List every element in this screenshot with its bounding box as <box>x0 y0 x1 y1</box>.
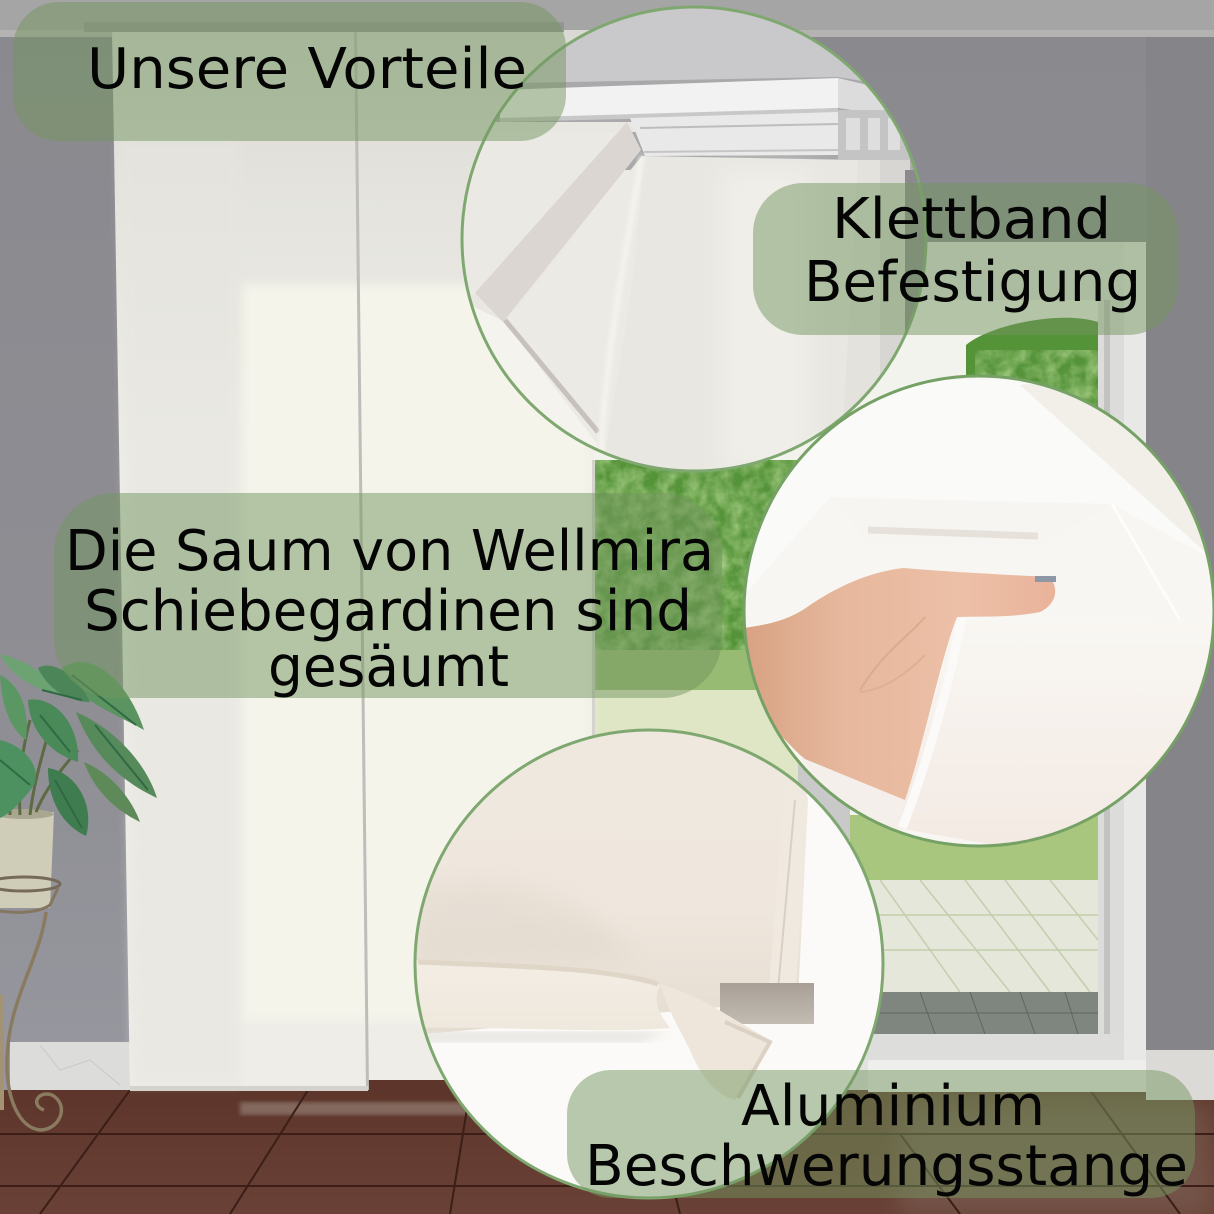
label: Aluminium Beschwerungsstange <box>567 1070 1195 1199</box>
label: Unsere Vorteile <box>13 2 566 141</box>
skirting board <box>10 1042 1214 1100</box>
label: Klettband Befestigung <box>753 183 1178 335</box>
metal stand <box>0 877 61 1130</box>
floor <box>0 1078 1214 1214</box>
detail circle: hand with hem <box>740 376 1214 860</box>
detail circle: weight bar and hem <box>415 725 883 1198</box>
label: hem description <box>54 493 722 700</box>
label: hem description: Die Saum von Wellmira <box>65 519 714 584</box>
behind-left area <box>474 132 618 170</box>
label: Aluminium Beschwerungsstange: Beschwerungsstange <box>585 1134 1188 1199</box>
window with garden view <box>590 242 1146 1092</box>
label: Aluminium Beschwerungsstange: Aluminium <box>741 1074 1045 1139</box>
sliding curtain panels <box>84 22 595 1091</box>
label: Unsere Vorteile: Unsere Vorteile <box>87 37 527 102</box>
detail circle: Klettband on rail <box>460 0 930 480</box>
label: hem description: gesäumt <box>268 635 509 700</box>
label: Klettband Befestigung: Befestigung <box>804 250 1141 315</box>
potted plant on metal stand <box>0 654 157 1130</box>
label: Klettband Befestigung: Klettband <box>832 187 1111 252</box>
curtain fabric <box>642 156 858 170</box>
label: hem description: Schiebegardinen sind <box>84 579 692 644</box>
velcro strip <box>475 122 641 322</box>
